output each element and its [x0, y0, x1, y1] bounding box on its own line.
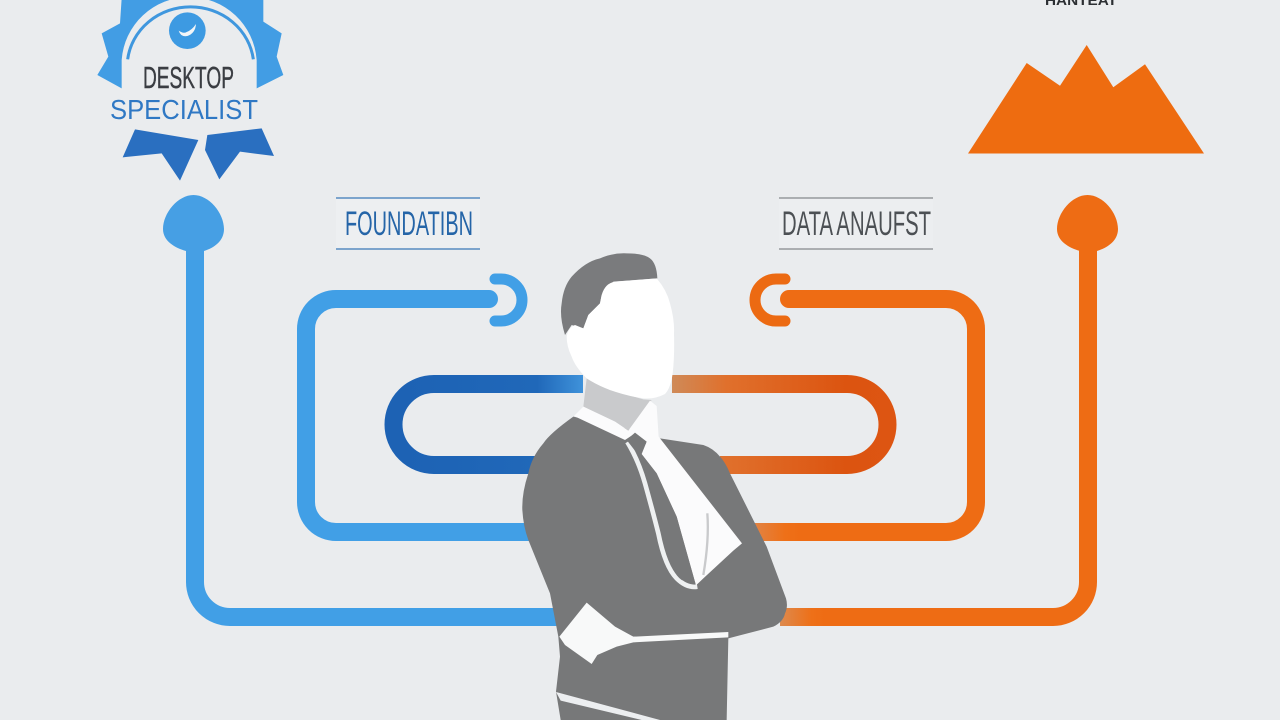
icon: check circle: [169, 12, 206, 49]
path: inner orange loop: [672, 384, 888, 465]
person: neck: [583, 378, 652, 431]
path: middle blue line: [306, 279, 530, 532]
person: shirt: [641, 437, 742, 585]
badge: scalloped seal: [97, 0, 283, 88]
person: face: [567, 278, 674, 398]
path: outer orange line: [780, 195, 1118, 617]
badge: inner disc: [122, 0, 257, 89]
label: foundation: [336, 198, 480, 249]
person: collar: [574, 401, 659, 444]
icon: orange hook: [755, 279, 785, 321]
icon: orange pin head: [1057, 195, 1118, 260]
badge title: specialist: SPECIALIST: [110, 94, 258, 125]
path: outer blue line: [163, 195, 560, 617]
badge title: desktop: DESKTOP: [143, 60, 234, 95]
person: tie: [627, 433, 695, 583]
icon: orange mountain: [968, 45, 1204, 154]
person: hair: [561, 253, 657, 335]
label: data analyst: [779, 198, 933, 249]
badge: left ribbon: [123, 129, 198, 181]
badge: desktop specialist: [97, 0, 283, 181]
person: business figure with folded arms: [522, 253, 787, 720]
label: foundation: FOUNDATIBN: [345, 205, 473, 243]
icon: blue hook: [495, 279, 522, 321]
person: jacket hem: [556, 692, 660, 720]
person: suit: [522, 417, 787, 720]
person: shirt fold: [703, 513, 708, 575]
badge: inner arc: [128, 7, 253, 59]
icon: blue pin head: [163, 195, 224, 260]
person: cuff and sleeve edge: [559, 603, 728, 664]
path: inner blue loop: [394, 384, 583, 465]
label: data analyst: DATA ANAUFST: [782, 205, 931, 243]
path: middle orange line: [750, 279, 976, 532]
person: shirt strip: [627, 442, 697, 587]
badge: right ribbon: [205, 128, 274, 179]
